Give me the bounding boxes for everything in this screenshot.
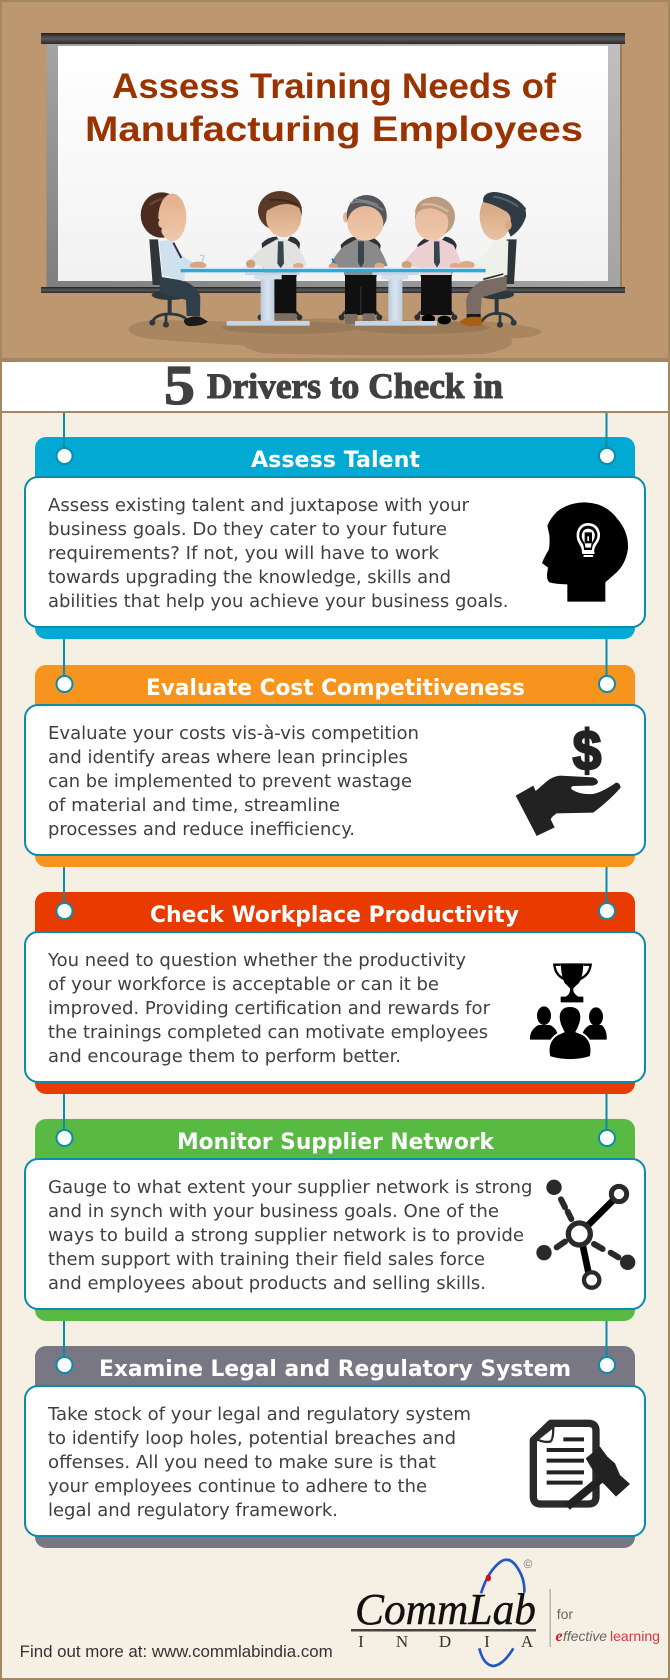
logo India letters: D: [439, 1632, 451, 1651]
icon: hand holding dollar: $: [573, 720, 601, 783]
body text: business goals. Do they cater to your future: [48, 520, 447, 540]
icon: head with light bulb: [542, 502, 628, 602]
heading: Check Workplace Productivity: [150, 903, 519, 928]
copyright mark: ©: [524, 1557, 532, 1571]
body text: your employees continue to adhere to the: [48, 1477, 427, 1497]
logo wordmark: CommLab: [355, 1585, 536, 1634]
body text: Gauge to what extent your supplier network is strong: [48, 1178, 532, 1198]
meeting table: [181, 268, 486, 326]
body text: abilities that help you achieve your business goals.: [48, 592, 508, 612]
body text: Take stock of your legal and regulatory system: [47, 1405, 471, 1425]
person 4: [402, 197, 462, 324]
footer link text: Find out more at: www.commlabindia.com: [20, 1643, 333, 1661]
tagline: learning: [610, 1628, 660, 1644]
body text: [48, 496, 508, 612]
body text: them support with training their field sales force: [48, 1250, 485, 1270]
subtitle: Drivers to Check in: [207, 366, 503, 406]
body text: [48, 1178, 532, 1294]
logo swoosh: [479, 1560, 524, 1666]
heading band: 5 drivers: [2, 355, 668, 417]
icon: network nodes: [536, 1180, 635, 1288]
body text: [48, 724, 419, 840]
tagline: ffective: [563, 1628, 607, 1644]
logo divider: [550, 1589, 551, 1647]
tagline: [556, 1606, 660, 1645]
body text: processes and reduce inefficiency.: [48, 820, 355, 840]
person 2: [246, 191, 307, 321]
floor shadow: [128, 318, 542, 355]
person 1: left side: [141, 192, 208, 328]
logo: CommLab India: [351, 1557, 660, 1666]
panel: monitor supplier network: [25, 1094, 645, 1321]
body text: offenses. All you need to make sure is that: [48, 1453, 436, 1473]
body text: of your workforce is acceptable or can it be: [48, 975, 439, 995]
body text: and employees about products and selling skills.: [48, 1274, 486, 1294]
body text: You need to question whether the productivity: [47, 951, 466, 971]
title: Assess Training Needs of: [112, 67, 556, 106]
heading: Monitor Supplier Network: [177, 1130, 495, 1155]
logo India letters: N: [396, 1632, 408, 1651]
heading: Evaluate Cost Competitiveness: [146, 676, 525, 701]
body text: and identify areas where lean principles: [48, 748, 408, 768]
logo India letters: A: [521, 1632, 534, 1651]
tagline: e: [556, 1628, 563, 1645]
logo India letters: I: [358, 1632, 364, 1651]
body text: [47, 951, 491, 1067]
person 5: right side: [459, 192, 526, 328]
logo India letters: [358, 1632, 534, 1651]
body text: to identify loop holes, potential breaches and: [48, 1429, 456, 1449]
icon: document and gavel: [533, 1423, 630, 1507]
panel: assess talent: [25, 413, 645, 639]
panel: check workplace productivity: [25, 867, 645, 1094]
panel: evaluate cost competitiveness: [25, 639, 645, 867]
panel: examine legal and regulatory system: [25, 1321, 645, 1548]
numeral 5: 5: [164, 355, 195, 417]
body text: of material and time, streamline: [48, 796, 340, 816]
body text: ways to build a strong supplier network is to provide: [48, 1226, 524, 1246]
tagline: for: [557, 1606, 573, 1622]
body text: can be implemented to prevent wastage: [48, 772, 412, 792]
body text: towards upgrading the knowledge, skills and: [48, 568, 451, 588]
body text: and in synch with your business goals. One of the: [48, 1202, 499, 1222]
illustration: five employees at a meeting table: [128, 191, 542, 355]
body text: requirements? If not, you will have to work: [48, 544, 440, 564]
cream lower background: [2, 413, 668, 1678]
body text: and encourage them to perform better.: [48, 1047, 401, 1067]
projector screen: [41, 33, 625, 293]
body text: Assess existing talent and juxtapose with your: [48, 496, 470, 516]
body text: the trainings completed can motivate employees: [48, 1023, 488, 1043]
body text: [47, 1405, 471, 1521]
body text: improved. Providing certification and rewards for: [48, 999, 491, 1019]
heading: Assess Talent: [251, 448, 420, 473]
icon: hand holding dollar: [516, 720, 621, 836]
logo India letters: I: [484, 1632, 490, 1651]
body text: Evaluate your costs vis-à-vis competition: [48, 724, 419, 744]
person 3: [329, 195, 388, 324]
heading: Examine Legal and Regulatory System: [99, 1357, 571, 1382]
title: [85, 67, 583, 149]
body text: legal and regulatory framework.: [48, 1501, 338, 1521]
icon: trophy and team: [530, 963, 607, 1060]
header panel: presentation scene: [2, 2, 668, 358]
title: Manufacturing Employees: [85, 110, 583, 149]
